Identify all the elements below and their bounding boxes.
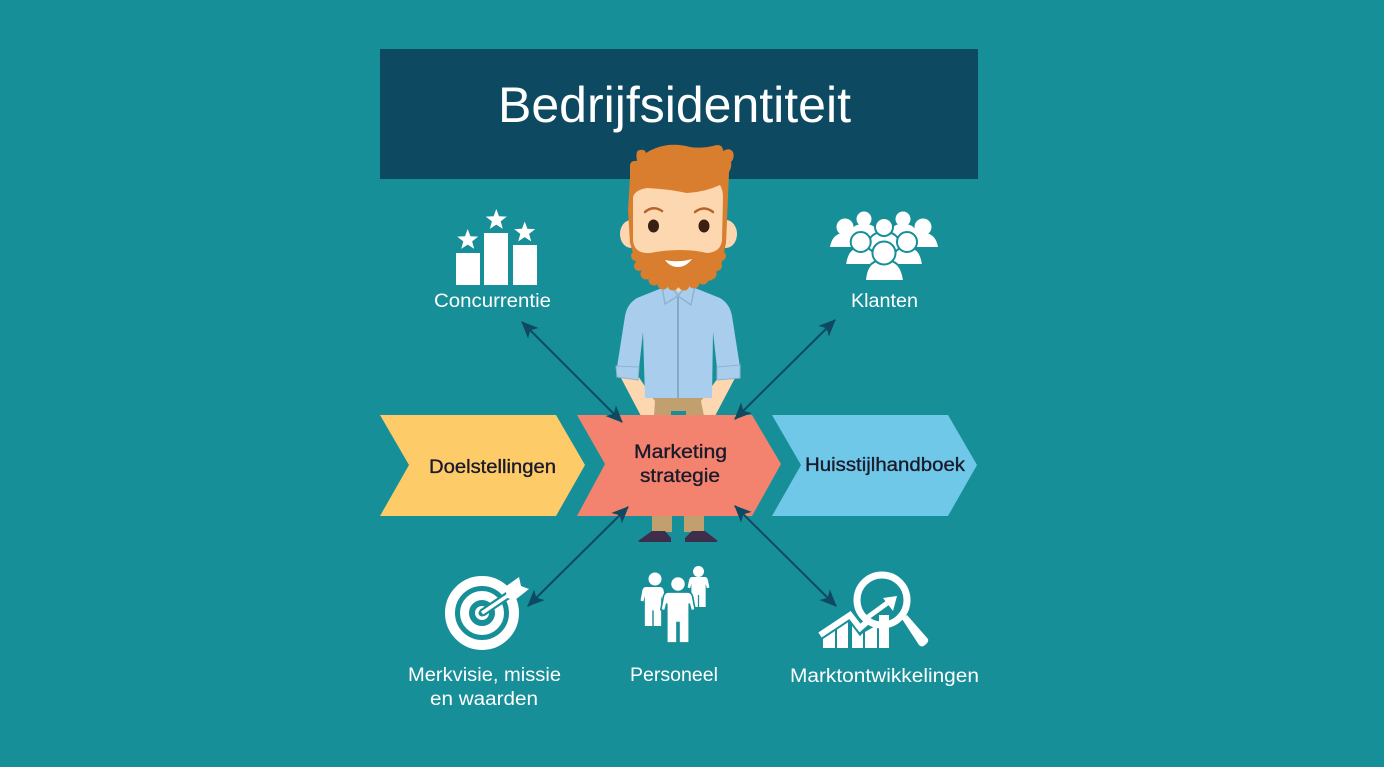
shirt [617, 288, 740, 398]
collar [662, 284, 695, 305]
smile [665, 259, 692, 267]
chevron: Doelstellingen: Doelstellingen [429, 457, 556, 478]
eyebrows [645, 208, 713, 212]
arrow: Klanten [735, 320, 835, 419]
title banner [380, 49, 978, 179]
label: Marktontwikkelingen: Marktontwikkelingen [790, 666, 979, 687]
arrows [522, 320, 836, 606]
label: Klanten: Klanten [851, 291, 918, 312]
chevron: Huisstijlhandboek: Huisstijlhandboek [805, 455, 966, 476]
eyes [648, 220, 710, 232]
chevron: Marketing strategie: strategie [640, 466, 720, 487]
icon: podium with stars [456, 209, 537, 285]
chevron: Huisstijlhandboek [772, 415, 977, 516]
icon: target with arrow [450, 577, 529, 645]
arrow: Merkvisie [528, 507, 628, 606]
belt gap [671, 411, 686, 415]
label: Personeel: Personeel [630, 665, 718, 686]
chevron: Doelstellingen [380, 415, 585, 516]
ears [620, 220, 737, 248]
legs [652, 510, 704, 532]
icon: customer group [830, 212, 938, 281]
neck [668, 284, 690, 292]
trousers [652, 396, 705, 416]
icon: staff [641, 566, 709, 643]
arrow: Marktontwikkelingen [735, 506, 836, 606]
face [633, 185, 723, 253]
label: Concurrentie: Concurrentie [434, 291, 551, 312]
forearms [621, 376, 735, 416]
chevron: Marketing strategie [577, 415, 781, 516]
label: Merkvisie, missie en waarden: Merkvisie, missie [408, 665, 561, 686]
shirt placket [677, 296, 679, 398]
chevron: Marketing strategie: Marketing [634, 442, 727, 463]
arrow: Concurrentie [522, 322, 622, 422]
label: Merkvisie, missie en waarden: en waarden [430, 689, 538, 710]
shirt cuffs [616, 365, 740, 380]
hair and beard [628, 145, 734, 290]
shoes [638, 531, 718, 542]
icon: market chart with magnifier [820, 575, 928, 648]
label: Merkvisie, missie en waarden [408, 665, 561, 710]
title: Bedrijfsidentiteit [498, 77, 851, 133]
character: bearded man [616, 145, 740, 542]
